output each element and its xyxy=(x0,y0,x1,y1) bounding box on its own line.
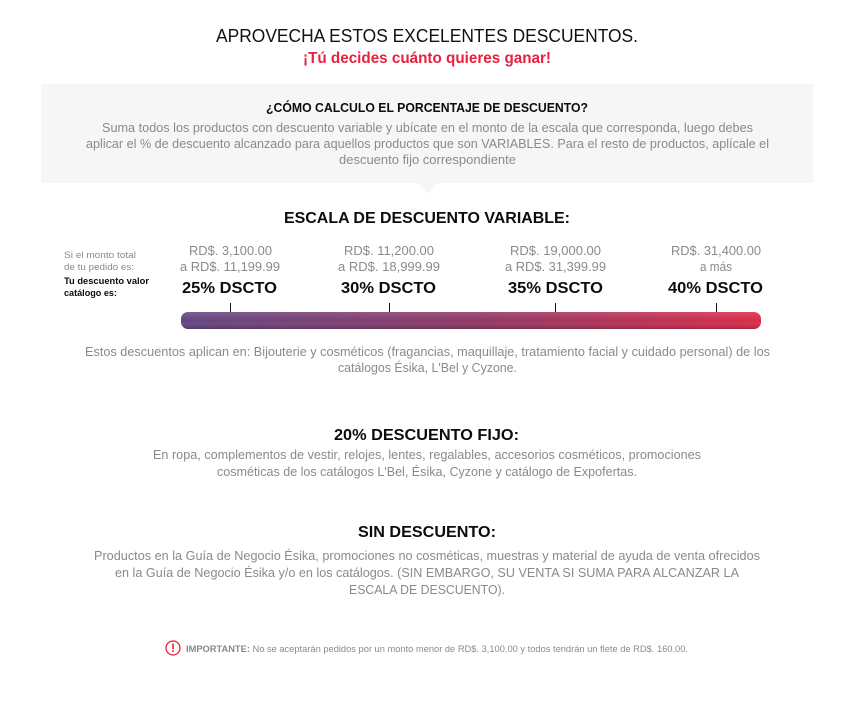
tier: 40%: a más xyxy=(700,260,732,274)
title: APROVECHA ESTOS EXCELENTES DESCUENTOS. xyxy=(216,26,638,46)
scale row labels: catálogo es: xyxy=(64,288,117,299)
tier: 30%: 30% DSCTO xyxy=(341,280,436,297)
subtitle: ¡Tú decides cuánto quieres ganar! xyxy=(303,50,551,67)
panel body text xyxy=(86,121,769,167)
no discount text: Productos en la Guía de Negocio Ésika, promociones no cosméticas, muestras y material de ayuda de venta ofrecidos xyxy=(94,548,760,563)
scale row labels: de tu pedido es: xyxy=(64,262,134,273)
tier: 35% xyxy=(505,244,606,297)
fixed discount text xyxy=(153,448,701,479)
tier: 25% xyxy=(180,244,280,297)
tier: 40%: 40% DSCTO xyxy=(668,280,763,297)
tier: 35%: a RD$. 31,399.99 xyxy=(505,260,606,274)
note: where discounts apply: Estos descuentos aplican en: Bijouterie y cosméticos (fragancias, maquillaje, tratamiento facial y cuidado personal) de los xyxy=(85,345,770,359)
panel: how to calculate xyxy=(41,84,813,194)
heading: no discount: SIN DESCUENTO: xyxy=(358,524,496,541)
gradient scale bar xyxy=(181,303,761,329)
panel body text: descuento fijo correspondiente xyxy=(339,153,516,167)
title xyxy=(216,26,638,67)
note: where discounts apply: catálogos Ésika, L'Bel y Cyzone. xyxy=(338,360,517,375)
fixed discount text: En ropa, complementos de vestir, relojes, lentes, regalables, accesorios cosméticos, promociones xyxy=(153,448,701,462)
tier: 25%: 25% DSCTO xyxy=(182,280,277,297)
icon: warning xyxy=(166,641,180,655)
fixed discount text: cosméticas de los catálogos L'Bel, Ésika, Cyzone y catálogo de Expofertas. xyxy=(217,464,637,479)
scale row labels: Si el monto total xyxy=(64,250,136,261)
tier: 40%: RD$. 31,400.00 xyxy=(671,244,761,258)
no discount text: ESCALA DE DESCUENTO). xyxy=(349,583,505,597)
no discount text: en la Guía de Negocio Ésika y/o en los catálogos. (SIN EMBARGO, SU VENTA SI SUMA PARA ALCANZAR LA xyxy=(115,565,740,580)
important note: IMPORTANTE: No se aceptarán pedidos por un monto menor de RD$. 3,100.00 y todos tendrán un flete de RD$. 160.00. xyxy=(186,644,688,654)
tier: 30%: RD$. 11,200.00 xyxy=(344,244,434,258)
tier: 40% xyxy=(668,244,763,297)
note: where discounts apply xyxy=(85,345,770,375)
panel body text: Suma todos los productos con descuento variable y ubícate en el monto de la escala que corresponda, luego debes xyxy=(102,121,753,135)
no discount text xyxy=(94,548,760,597)
tier: 35%: 35% DSCTO xyxy=(508,280,603,297)
tier: 30%: a RD$. 18,999.99 xyxy=(338,260,440,274)
tier: 30% xyxy=(338,244,440,297)
scale row labels: Tu descuento valor xyxy=(64,276,149,287)
tier: 25%: RD$. 3,100.00 xyxy=(189,244,272,258)
panel heading: ¿CÓMO CALCULO EL PORCENTAJE DE DESCUENTO? xyxy=(266,100,588,115)
heading: fixed discount: 20% DESCUENTO FIJO: xyxy=(334,427,519,444)
heading: variable scale: ESCALA DE DESCUENTO VARIABLE: xyxy=(284,210,570,227)
tier: 35%: RD$. 19,000.00 xyxy=(510,244,601,258)
tier: 25%: a RD$. 11,199.99 xyxy=(180,260,280,274)
scale row labels xyxy=(64,250,149,299)
panel body text: aplicar el % de descuento alcanzado para aquellos productos que son VARIABLES. Para el resto de productos, aplícale el xyxy=(86,137,769,151)
